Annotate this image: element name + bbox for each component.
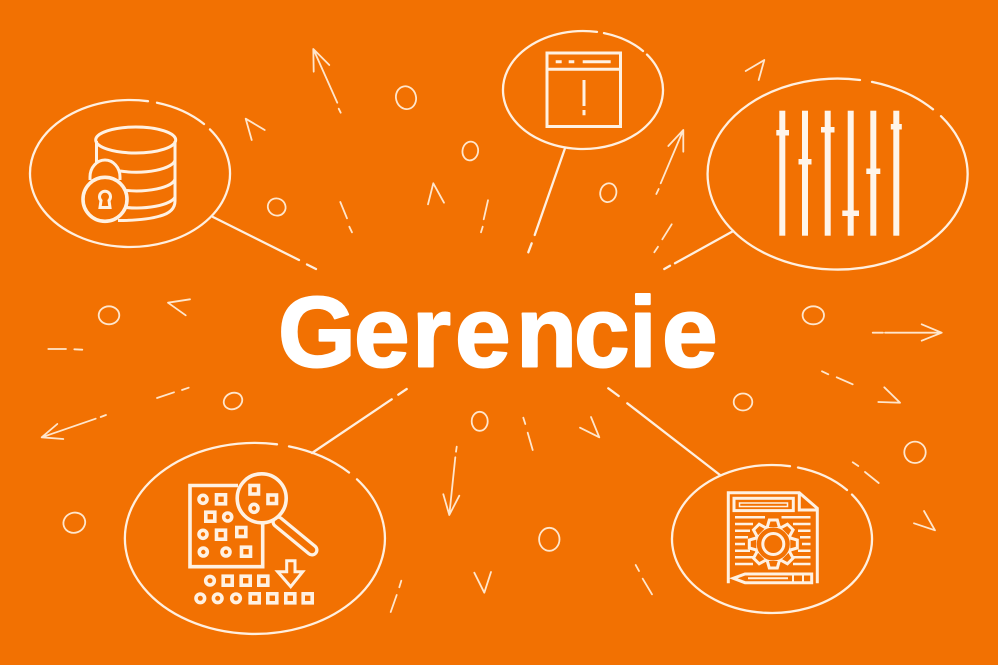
- icon: document with gear and pencil: [728, 493, 817, 583]
- chevron: lower centre right: [580, 417, 599, 437]
- chevron: lower right: [914, 511, 935, 530]
- icon: sheet with magnifier and sorted items: [190, 474, 312, 603]
- decorative small circles: [61, 84, 926, 551]
- circle: [393, 84, 419, 111]
- decorative chevrons: [168, 60, 935, 593]
- arrow: right: [873, 324, 942, 341]
- decorative arrows: [42, 49, 942, 515]
- circle: [221, 390, 245, 412]
- chevron: top right: [746, 60, 764, 80]
- dash: [481, 200, 488, 232]
- bubble outline: document settings: [672, 465, 872, 613]
- circle: [265, 195, 289, 219]
- arrow: lower left: [42, 415, 106, 439]
- connector: document settings to title: [608, 388, 720, 475]
- title: Gerencie: [278, 276, 718, 388]
- circle: [734, 394, 752, 410]
- panel: database security: [30, 100, 316, 269]
- panel: browser window alert: [503, 31, 663, 252]
- icon: database with padlock: [83, 127, 176, 221]
- arrow: down: [443, 447, 459, 515]
- arrow: upper right: [656, 130, 683, 194]
- dash: [48, 348, 82, 351]
- dash: [157, 388, 189, 398]
- icon: browser window with exclamation: [547, 53, 620, 126]
- bubble outline: window: [503, 31, 663, 149]
- icon: slider controls: [776, 111, 902, 236]
- chevron: left: [168, 299, 190, 315]
- bubble outline: data search: [125, 443, 385, 634]
- panel: sliders: [664, 79, 968, 270]
- connector: data search to title: [312, 389, 407, 453]
- dash: [654, 224, 672, 252]
- dash: [636, 565, 652, 594]
- connector: sliders to title: [664, 231, 733, 269]
- circle: [539, 528, 560, 551]
- decorative dashes: [48, 200, 879, 612]
- bubble outline: database: [30, 100, 230, 247]
- chevron: upper left: [246, 119, 265, 140]
- panel: data search: [125, 389, 407, 634]
- circle: [461, 140, 480, 162]
- circle: [904, 442, 926, 463]
- connector: database to title: [213, 217, 316, 269]
- chevron: top centre: [428, 183, 444, 204]
- circle: [99, 306, 119, 324]
- arrow: upper left: [313, 49, 341, 113]
- dash: [822, 371, 853, 384]
- connector: window to title: [528, 148, 565, 252]
- circle: [598, 181, 618, 204]
- dash: [853, 462, 879, 483]
- dash: [391, 581, 401, 612]
- circle: [61, 510, 88, 536]
- chevron: bottom centre: [474, 572, 491, 593]
- circle: [803, 306, 824, 324]
- dash: [523, 418, 533, 450]
- dash: [340, 202, 352, 232]
- panel: document settings: [608, 388, 872, 613]
- chevron: right: [878, 387, 900, 403]
- circle: [472, 412, 488, 431]
- bubble outline: sliders: [708, 79, 968, 270]
